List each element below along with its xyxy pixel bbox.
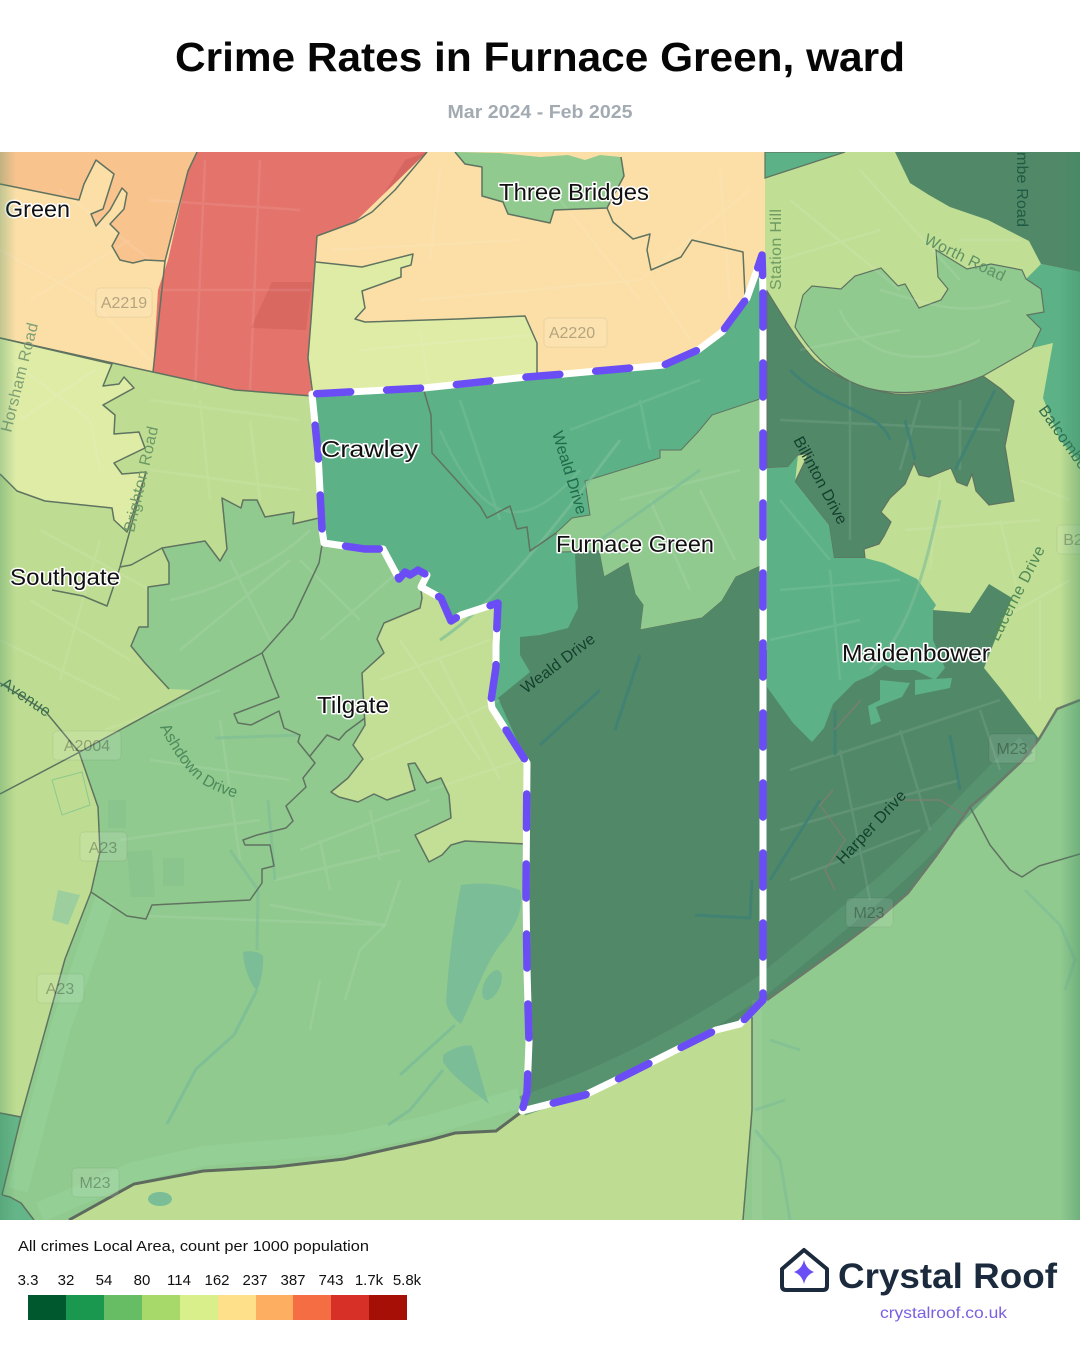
- choropleth map panel: [0, 152, 1080, 1220]
- motorway band: west: [518, 1096, 521, 1102]
- map edge fade: [0, 152, 14, 1220]
- legend scale labels: 3.3: [18, 1272, 38, 1289]
- legend scale labels: 114: [167, 1272, 191, 1289]
- region: east teal: [1026, 264, 1080, 462]
- road labels: Lucerne Drive: [986, 543, 1049, 644]
- choropleth map panel: Three Bridges: [499, 179, 649, 205]
- district boundary lines: [0, 152, 1080, 1220]
- road shields: A2004: [64, 738, 110, 755]
- road labels: Weald Drive: [548, 429, 590, 517]
- region: Maidenbower dark: [765, 584, 1039, 1000]
- road labels: Worth Road: [921, 231, 1008, 285]
- wordmark: Crystal Roof: [838, 1257, 1057, 1296]
- region: Southgate mid green: [131, 498, 322, 690]
- region: Three Bridges green: [455, 152, 624, 223]
- ward internal boundaries: [424, 391, 556, 551]
- region: north-west cream: [0, 161, 184, 371]
- region: north-west orange: [0, 152, 197, 263]
- title: Crime Rates in Furnace Green, ward: [175, 34, 905, 80]
- road labels: [0, 153, 1080, 864]
- road labels: Harper Drive: [833, 787, 910, 868]
- legend scale labels: 237: [242, 1272, 268, 1289]
- road labels: Ashdown Drive: [160, 726, 236, 797]
- motorway band: east: [522, 745, 1026, 1106]
- road shields: M23: [853, 905, 885, 922]
- water: lakes: [148, 884, 521, 1206]
- logo: Crystal Roof: [782, 1250, 1057, 1322]
- legend scale labels: 80: [134, 1272, 150, 1289]
- road shields: M23: [79, 1175, 111, 1192]
- legend scale labels: 54: [96, 1272, 112, 1289]
- road shields: A2220: [549, 325, 595, 342]
- street network: [0, 160, 1070, 1030]
- legend title: All crimes Local Area, count per 1000 population: [18, 1239, 369, 1255]
- region: Three Bridges cream: [314, 152, 765, 372]
- region: Northgate pale: [308, 254, 537, 396]
- legend scale labels: 5.8k: [393, 1272, 422, 1289]
- pitches and parks: [52, 772, 90, 925]
- legend scale labels: 1.7k: [355, 1272, 384, 1289]
- region: Horsham Road pale: [0, 338, 146, 532]
- choropleth map panel: Maidenbower: [842, 640, 990, 666]
- road labels: mbe Road: [1013, 152, 1030, 227]
- legend scale labels: [18, 1272, 422, 1289]
- road shields: M23: [996, 741, 1028, 758]
- road shields: A2219: [101, 295, 147, 312]
- ward: dark green area: [498, 551, 763, 1113]
- region: east light green: [765, 152, 1080, 740]
- ward: teal area: [316, 275, 760, 740]
- region: south light green: [69, 1017, 752, 1220]
- road shields: A23: [89, 840, 117, 857]
- place labels: Green: [5, 196, 70, 222]
- region: north-east dark: [895, 152, 1080, 272]
- icon: house with star: [782, 1250, 827, 1290]
- ward boundary: white casing: [312, 255, 763, 1111]
- road labels: Station Hill: [768, 209, 785, 290]
- region: west light green: [0, 338, 322, 794]
- region: Tilgate light green: [331, 590, 527, 862]
- region: town centre red: [153, 152, 427, 396]
- road shields: [37, 288, 1080, 1197]
- road labels: Weald Drive: [518, 631, 599, 697]
- water: streams: [167, 440, 1075, 1220]
- road labels: Brighton Road: [121, 425, 162, 534]
- choropleth map panel: Tilgate: [317, 692, 389, 718]
- region: Maidenbower teal: [767, 455, 945, 742]
- website: crystalroof.co.uk: [880, 1305, 1008, 1322]
- ward: mid green area: [556, 398, 763, 630]
- subtitle: date range: Mar 2024 - Feb 2025: [448, 102, 632, 122]
- legend colour bar: [28, 1295, 407, 1320]
- choropleth map panel: Southgate: [10, 564, 120, 590]
- ward boundary: purple dashes: [312, 255, 763, 1111]
- region: north-east estate mid green: [795, 250, 1044, 392]
- region: Pound Hill dark: [767, 291, 1014, 558]
- choropleth map panel: Crawley: [321, 436, 419, 462]
- road shields: A23: [46, 981, 74, 998]
- railway band: [752, 1000, 758, 1006]
- region: west of A23: [0, 752, 100, 1117]
- legend scale labels: 387: [280, 1272, 306, 1289]
- choropleth map panel: Furnace Green: [556, 531, 714, 557]
- legend scale labels: 162: [204, 1272, 230, 1289]
- legend scale labels: 743: [318, 1272, 344, 1289]
- region: north-east corner teal: [765, 152, 845, 178]
- road labels: Billinton Drive: [789, 434, 850, 528]
- motorway M23 thick boundary: [69, 1113, 520, 1220]
- legend scale labels: 32: [58, 1272, 74, 1289]
